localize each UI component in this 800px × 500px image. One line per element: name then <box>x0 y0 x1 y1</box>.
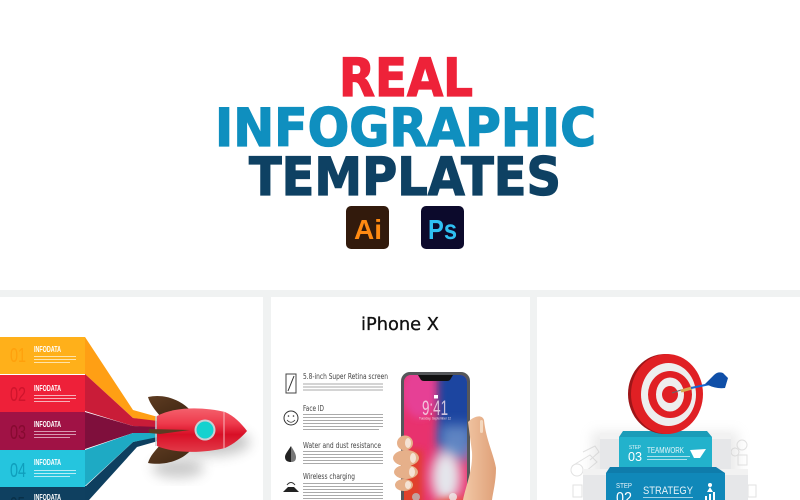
band 01 ribbon: 01 <box>10 345 26 367</box>
band 03 ribbon: 03 <box>10 422 26 444</box>
step 02: STEP <box>616 483 632 490</box>
band 01 ribbon: INFODATA <box>34 345 61 354</box>
band 02 ribbon: INFODATA <box>34 384 61 393</box>
icon: Adobe Photoshop: Ps <box>428 214 457 245</box>
phone: Tuesday, September 12 <box>419 416 451 420</box>
step 02 <box>583 467 748 500</box>
panel: rocket infographic <box>0 297 263 500</box>
icon: hand holding phone <box>393 416 496 500</box>
band 04 ribbon: 04 <box>10 460 26 482</box>
feature: Face ID: Face ID <box>303 404 324 413</box>
step 02: STRATEGY <box>643 485 694 497</box>
steps background doodles <box>571 440 756 497</box>
icon: Adobe Illustrator <box>346 206 389 249</box>
feature: Wireless charging: Wireless charging <box>303 472 355 481</box>
band 03 ribbon <box>0 412 158 450</box>
title line: TEMPLATES: TEMPLATES <box>249 147 561 208</box>
title line: INFOGRAPHIC: INFOGRAPHIC <box>215 98 596 159</box>
iPhone X heading: iPhone X <box>361 314 439 335</box>
band 04 ribbon: INFODATA <box>34 458 61 467</box>
band 02 ribbon: 02 <box>10 384 26 406</box>
step 03: 03 <box>628 449 642 464</box>
icon: Adobe Illustrator: Ai <box>354 214 382 245</box>
band 02 ribbon <box>0 374 158 428</box>
feature: Water and dust resistance: Water and dust resistance <box>303 441 381 450</box>
feature: Wireless charging <box>283 472 383 499</box>
band 05 ribbon <box>0 436 158 500</box>
feature: Super Retina screen: 5.8-inch Super Retina screen <box>303 372 388 381</box>
shadow behind steps <box>592 432 738 500</box>
step 03 <box>600 431 731 469</box>
icon: Adobe Photoshop <box>421 206 464 249</box>
phone <box>401 372 470 500</box>
gallery background strip <box>0 290 800 500</box>
phone: 9:41 <box>422 397 448 420</box>
feature: Face ID <box>284 404 383 430</box>
band 03 ribbon: INFODATA <box>34 420 61 429</box>
band 01 ribbon <box>0 337 158 422</box>
panel: iPhone X <box>271 297 530 500</box>
step 03: STEP <box>629 445 641 451</box>
feature: Super Retina screen <box>286 372 388 393</box>
title line: REAL: REAL <box>339 48 473 109</box>
step 03: TEAMWORK <box>647 446 685 455</box>
icon: rocket <box>148 396 250 478</box>
title <box>215 48 596 208</box>
feature: Water and dust resistance <box>285 441 383 464</box>
panel: target on steps <box>537 297 800 500</box>
icon: target with dart <box>628 354 728 434</box>
band 04 ribbon <box>0 433 158 487</box>
